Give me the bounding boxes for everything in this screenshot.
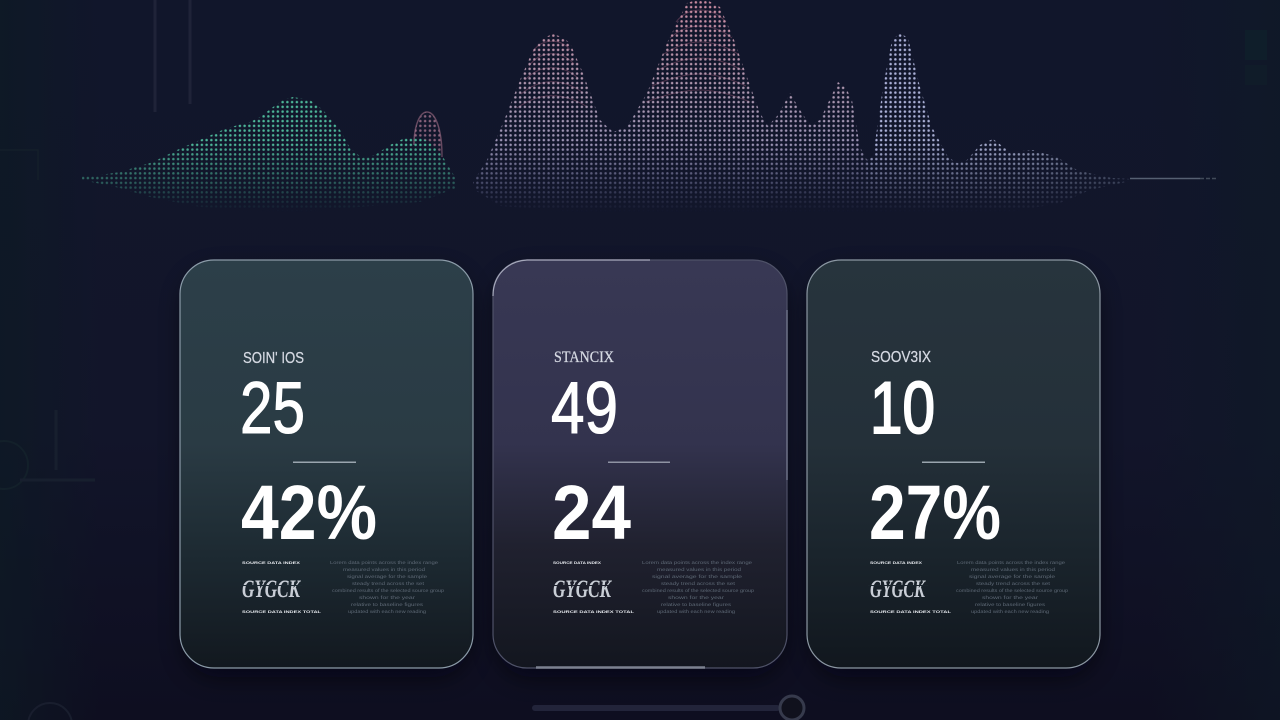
percentage: 42% (241, 470, 377, 556)
description text: shown for the year (982, 595, 1039, 600)
caption block: GYGCK (242, 576, 302, 603)
value: 25 (240, 368, 305, 449)
caption block (551, 560, 635, 614)
description text (330, 560, 445, 614)
caption block: SOURCE DATA INDEX (553, 560, 601, 565)
description text: updated with each new reading (348, 609, 427, 614)
divider (293, 462, 356, 463)
label: STANCIX (554, 349, 614, 366)
description text: signal average for the sample (969, 574, 1056, 579)
description text (956, 560, 1069, 614)
description text: steady trend across the set (661, 581, 736, 586)
description text: combined results of the selected source group (956, 588, 1069, 593)
description text: Lorem data points across the index range (330, 560, 439, 565)
label: SOOV3IX (871, 349, 931, 366)
contour arcs on pink peaks (517, 10, 750, 108)
divider (922, 462, 985, 463)
description text: signal average for the sample (652, 574, 743, 579)
value: 10 (870, 368, 935, 449)
caption block: SOURCE DATA INDEX (870, 560, 922, 565)
description text: updated with each new reading (971, 609, 1050, 614)
description text: measured values in this period (971, 567, 1056, 572)
label: SOIN' IOS (243, 350, 304, 367)
description text: relative to baseline figures (661, 602, 732, 607)
description text: signal average for the sample (347, 574, 428, 579)
description text: combined results of the selected source group (642, 588, 755, 593)
description text (642, 560, 755, 614)
description text: shown for the year (668, 595, 725, 600)
area chart: green waveform (82, 97, 456, 212)
percentage: 24 (552, 470, 631, 556)
value: 49 (551, 368, 618, 449)
caption block: GYGCK (870, 576, 927, 603)
description text: relative to baseline figures (351, 602, 424, 607)
panel: card two (493, 260, 787, 677)
description text: shown for the year (359, 595, 416, 600)
description text: Lorem data points across the index range (957, 560, 1066, 565)
description text: steady trend across the set (976, 581, 1051, 586)
description text: combined results of the selected source group (332, 588, 445, 593)
slider control (532, 696, 804, 720)
description text: relative to baseline figures (975, 602, 1046, 607)
caption block: SOURCE DATA INDEX TOTAL (870, 609, 952, 614)
caption block (868, 560, 952, 614)
description text: measured values in this period (657, 567, 742, 572)
panel: card one (180, 260, 473, 677)
trailing signal line (1130, 178, 1216, 180)
caption block: SOURCE DATA INDEX TOTAL (242, 609, 322, 614)
caption block (240, 560, 322, 614)
percentage: 27% (869, 470, 1001, 556)
caption block: SOURCE DATA INDEX TOTAL (553, 609, 635, 614)
caption block: GYGCK (553, 576, 613, 603)
small pink peak behind green (414, 112, 441, 154)
description text: Lorem data points across the index range (642, 560, 753, 565)
description text: measured values in this period (343, 567, 426, 572)
divider (608, 462, 670, 463)
area chart: pink and violet waveform (473, 0, 1130, 214)
panel: card three (807, 260, 1100, 677)
description text: steady trend across the set (352, 581, 425, 586)
description text: updated with each new reading (657, 609, 736, 614)
caption block: SOURCE DATA INDEX (242, 560, 300, 565)
